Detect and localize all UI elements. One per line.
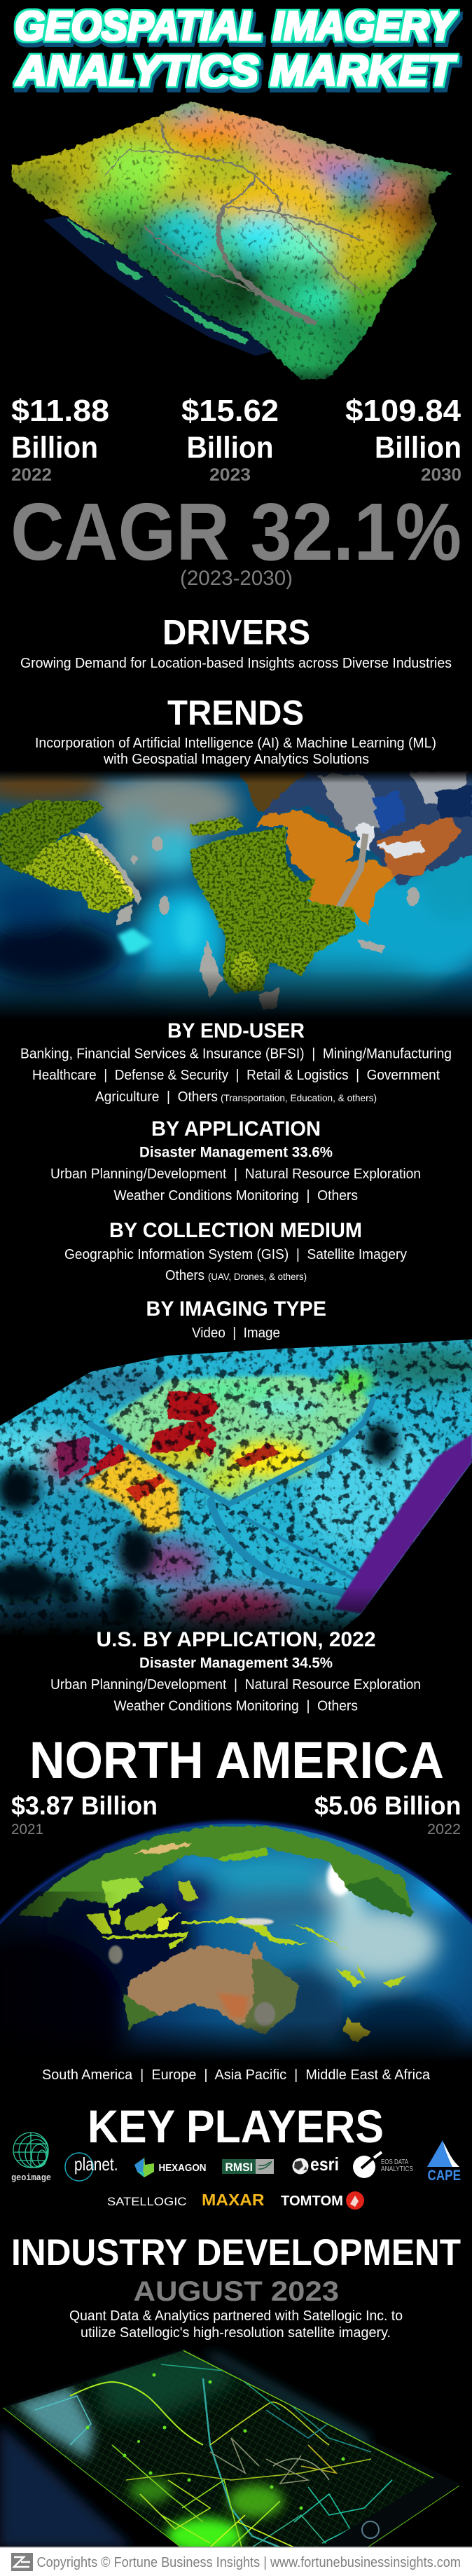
australia — [127, 1941, 298, 2034]
dark lower-left patches — [0, 1424, 397, 1625]
stat: north america 2021: 2021 — [11, 1821, 43, 1838]
section: by collection medium: BY COLLECTION MEDIUM — [109, 1219, 362, 1242]
bottom fade — [0, 970, 472, 1019]
road network — [90, 1399, 373, 1594]
footer logo — [11, 2553, 33, 2571]
logo: maxar: MAXAR — [202, 2191, 265, 2209]
section: by application: BY APPLICATION — [151, 1117, 321, 1141]
logo: eos data analytics: EOS DATA — [381, 2158, 408, 2166]
central park patch — [105, 1375, 373, 1499]
stat: north america 2021 — [11, 1791, 158, 1838]
stat: 2030 market size: 2030 — [421, 465, 461, 485]
terrain edge patches — [67, 219, 249, 345]
stat: 2023 market size: 2023 — [209, 465, 251, 485]
heading: north america: NORTH AMERICA — [29, 1731, 444, 1789]
stat: north america 2022: $5.06 Billion — [314, 1791, 461, 1820]
section: U.S. by application: Weather Conditions Monitoring | Others — [113, 1698, 358, 1714]
stat: 2030 market size: $109.84 — [345, 394, 461, 428]
cloud highlight — [327, 1859, 352, 1896]
forest canopy texture — [0, 799, 364, 995]
stat: 2022 market size: Billion — [11, 430, 98, 465]
logo: rmsi — [222, 2159, 274, 2174]
stat: north america 2021: $3.87 Billion — [11, 1791, 158, 1820]
logo: tomtom — [281, 2191, 364, 2210]
asia coast — [18, 1826, 412, 1917]
tablet edge lines — [4, 2350, 459, 2547]
image: colored terrain elevation map — [0, 98, 472, 385]
logo: planet — [65, 2153, 118, 2181]
text: trends description: Incorporation of Artificial Intelligence (AI) & Machine Learning (ML) — [35, 736, 436, 751]
stat: 2023 market size: $15.62 — [181, 394, 279, 428]
top fade — [0, 771, 472, 783]
text: other regions: South America | Europe | Asia Pacific | Middle East & Africa — [42, 2067, 431, 2083]
logo: rmsi: RMSI — [225, 2161, 253, 2174]
stat: 2030 market size — [345, 394, 461, 485]
text: industry development description — [69, 2308, 403, 2341]
stat: 2030 market size: Billion — [375, 430, 461, 465]
lidar speckle — [0, 1338, 472, 1636]
gray river — [336, 833, 368, 907]
section: by collection medium: (UAV, Drones, & others) — [208, 1271, 307, 1282]
section: by end-user: BY END-USER — [167, 1019, 305, 1042]
CAGR period: (2023-2030) — [180, 567, 293, 590]
logo: hexagon: HEXAGON — [158, 2162, 206, 2174]
bottom fade — [0, 1589, 379, 1636]
bright cyan shallows — [118, 928, 153, 954]
map nodes — [85, 2374, 380, 2509]
desk — [0, 2424, 133, 2547]
section: by end-user: (Transportation, Education, & others) — [221, 1092, 377, 1103]
upper-right mountains — [238, 764, 472, 925]
section: by application — [50, 1117, 421, 1204]
side highlights — [203, 2354, 371, 2445]
text: industry development description: utilize Satellogic's high-resolution satellite imagery. — [81, 2325, 391, 2341]
section: by end-user: Healthcare | Defense & Security | Retail & Logistics | Government — [32, 1068, 440, 1083]
map street grid — [3, 2350, 433, 2547]
section: U.S. by application — [50, 1628, 421, 1714]
screen glare — [14, 2385, 95, 2459]
heading: key players: KEY PLAYERS — [88, 2100, 384, 2152]
footer bar — [0, 2547, 472, 2576]
heading: trends: TRENDS — [167, 694, 304, 733]
text: trends description: with Geospatial Imagery Analytics Solutions — [103, 752, 369, 767]
shore sand and rock — [76, 832, 419, 1009]
ocean detail — [0, 1848, 469, 2055]
text: trends description — [35, 736, 436, 767]
bottom-left shadow — [0, 1892, 112, 2023]
section: by collection medium: Geographic Information System (GIS) | Satellite Imagery — [64, 1247, 407, 1262]
section: by application: Disaster Management 33.6% — [139, 1145, 333, 1160]
image: aerial coastline — [0, 764, 472, 1019]
logo: esri: esri — [310, 2154, 339, 2175]
section: by imaging type — [146, 1297, 326, 1341]
green glow — [166, 2518, 243, 2554]
stat: 2022 market size: $11.88 — [11, 394, 109, 428]
section: by collection medium — [64, 1219, 407, 1283]
stat: north america 2022 — [314, 1791, 461, 1838]
stat: north america 2022: 2022 — [427, 1821, 461, 1838]
logo: geoimage: geoimage — [11, 2172, 51, 2183]
stat: 2023 market size: Billion — [186, 430, 273, 465]
home button — [362, 2521, 379, 2538]
section: U.S. by application: U.S. BY APPLICATION, 2022 — [97, 1628, 375, 1651]
section: by application: Urban Planning/Development | Natural Resource Exploration — [50, 1166, 421, 1182]
logo: geoimage — [11, 2133, 51, 2183]
logo: hexagon — [134, 2156, 206, 2177]
stat: 2022 market size — [11, 394, 109, 485]
logo: planet: planet. — [74, 2154, 118, 2175]
logo: cape: CAPE — [427, 2168, 461, 2184]
land masses — [18, 1826, 413, 2042]
logo: cape — [427, 2140, 461, 2184]
title: GEOSPATIAL IMAGERY — [15, 4, 458, 49]
text: industry development description: Quant Data & Analytics partnered with Satellogic Inc. to — [69, 2308, 403, 2324]
image: urban lidar point cloud — [0, 1338, 472, 1641]
bottom fade — [53, 2023, 472, 2062]
map traces — [35, 2350, 433, 2547]
section: by imaging type: Video | Image — [192, 1325, 280, 1341]
logo: eos data analytics: ANALYTICS — [381, 2165, 413, 2173]
tablet body — [1, 2348, 459, 2547]
section: U.S. by application: Urban Planning/Development | Natural Resource Exploration — [50, 1677, 421, 1693]
stat: 2022 market size: 2022 — [11, 465, 52, 485]
image: earth globe — [0, 1818, 472, 2060]
terrain roads — [105, 119, 364, 324]
logo: eos data analytics — [353, 2152, 413, 2178]
terrain surface texture — [11, 102, 445, 379]
heading: august 2023: AUGUST 2023 — [133, 2276, 339, 2307]
purple side wall — [334, 1434, 472, 1613]
text: drivers description: Growing Demand for Location-based Insights across Diverse Industries — [20, 656, 452, 671]
title: ANALYTICS MARKET — [15, 47, 457, 95]
logo: esri — [293, 2154, 339, 2175]
section: by application: Weather Conditions Monitoring | Others — [113, 1188, 358, 1204]
section: by end-user: Banking, Financial Services & Insurance (BFSI) | Mining/Manufacturing — [20, 1047, 452, 1062]
stat: 2023 market size — [181, 394, 279, 485]
section: by end-user — [20, 1019, 452, 1105]
section: by collection medium: Others — [165, 1268, 204, 1283]
heading: drivers: DRIVERS — [162, 612, 310, 652]
red buildings — [56, 1391, 280, 1503]
section: by end-user: Agriculture | Others — [95, 1089, 218, 1105]
yellow plot — [84, 1450, 181, 1534]
section: by imaging type: BY IMAGING TYPE — [146, 1297, 326, 1321]
indonesia and pacific islands — [85, 1881, 406, 2042]
image: glowing tablet map — [0, 2347, 472, 2554]
title — [15, 4, 458, 95]
section: U.S. by application: Disaster Management 34.5% — [139, 1655, 333, 1672]
forests — [0, 801, 355, 993]
logo: tomtom: TOMTOM — [281, 2193, 343, 2209]
logo: satellogic: SATELLOGIC — [107, 2195, 186, 2208]
